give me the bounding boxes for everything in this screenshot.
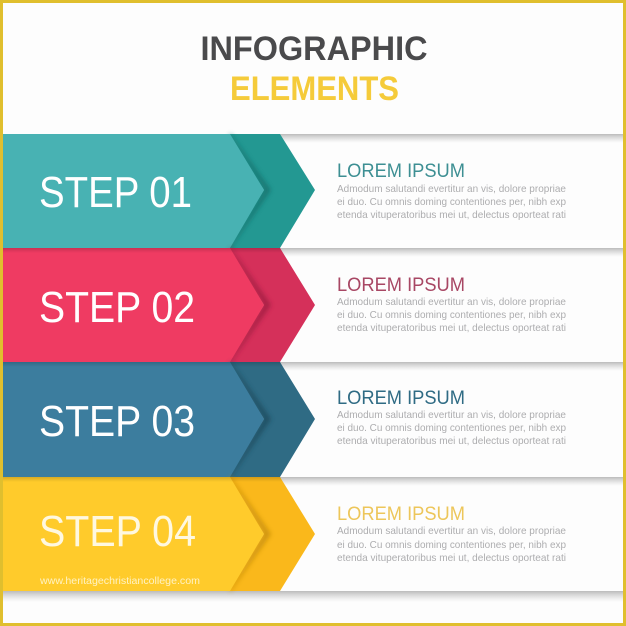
arrow front bbox=[3, 248, 264, 362]
bottom shadow bbox=[3, 591, 623, 602]
panel: step 3 bbox=[3, 362, 623, 477]
text block bbox=[337, 388, 566, 447]
step label: STEP 01 bbox=[39, 168, 192, 217]
text block: Admodum salutandi evertitur an vis, dolore propriae bbox=[337, 183, 566, 195]
arrow front bbox=[3, 362, 264, 477]
text block: Admodum salutandi evertitur an vis, dolore propriae bbox=[337, 409, 566, 421]
band shadow bbox=[280, 477, 623, 486]
text block: etenda vituperatoribus mei ut, delectus oporteat rati bbox=[337, 435, 566, 447]
arrow front bbox=[3, 134, 264, 248]
text block: Admodum salutandi evertitur an vis, dolore propriae bbox=[337, 525, 566, 537]
text block: ei duo. Cu omnis doming contentiones per, nibh exp bbox=[337, 196, 566, 208]
arrow back bbox=[228, 362, 315, 477]
arrow back bbox=[228, 134, 315, 248]
text block: LOREM IPSUM bbox=[337, 504, 465, 525]
panel: step 2 bbox=[3, 248, 623, 362]
arrow front shadow bbox=[229, 362, 271, 477]
text block bbox=[337, 504, 566, 564]
text block: ei duo. Cu omnis doming contentiones per, nibh exp bbox=[337, 309, 566, 321]
text block: etenda vituperatoribus mei ut, delectus oporteat rati bbox=[337, 552, 566, 564]
top shading bbox=[3, 248, 283, 253]
watermark: www.heritagechristiancollege.com bbox=[39, 576, 200, 587]
text block: ei duo. Cu omnis doming contentiones per, nibh exp bbox=[337, 422, 566, 434]
text block: Admodum salutandi evertitur an vis, dolore propriae bbox=[337, 296, 566, 308]
text block: LOREM IPSUM bbox=[337, 388, 465, 409]
arrow front shadow bbox=[229, 477, 271, 591]
band shadow bbox=[280, 248, 623, 257]
step label: STEP 02 bbox=[39, 283, 195, 332]
band shadow bbox=[280, 362, 623, 371]
arrow front bbox=[3, 477, 264, 591]
text block bbox=[337, 161, 566, 221]
text block: etenda vituperatoribus mei ut, delectus oporteat rati bbox=[337, 209, 566, 221]
text block: ei duo. Cu omnis doming contentiones per, nibh exp bbox=[337, 539, 566, 551]
band shadow bbox=[280, 134, 623, 143]
text block: etenda vituperatoribus mei ut, delectus oporteat rati bbox=[337, 322, 566, 334]
arrow back bbox=[228, 477, 315, 591]
step label: STEP 03 bbox=[39, 397, 195, 446]
text block: LOREM IPSUM bbox=[337, 275, 465, 296]
title: ELEMENTS bbox=[230, 70, 399, 108]
title bbox=[200, 30, 428, 108]
arrow back bbox=[228, 248, 315, 362]
step label: STEP 04 bbox=[39, 507, 196, 556]
panel: step 4 bbox=[3, 477, 623, 602]
arrow front shadow bbox=[229, 134, 271, 248]
text block: LOREM IPSUM bbox=[337, 161, 465, 182]
text block bbox=[337, 275, 566, 334]
top shading bbox=[3, 362, 283, 367]
arrow front shadow bbox=[229, 248, 271, 362]
panel: step 1 bbox=[3, 134, 623, 248]
top shading bbox=[3, 477, 283, 482]
title: INFOGRAPHIC bbox=[200, 30, 428, 68]
